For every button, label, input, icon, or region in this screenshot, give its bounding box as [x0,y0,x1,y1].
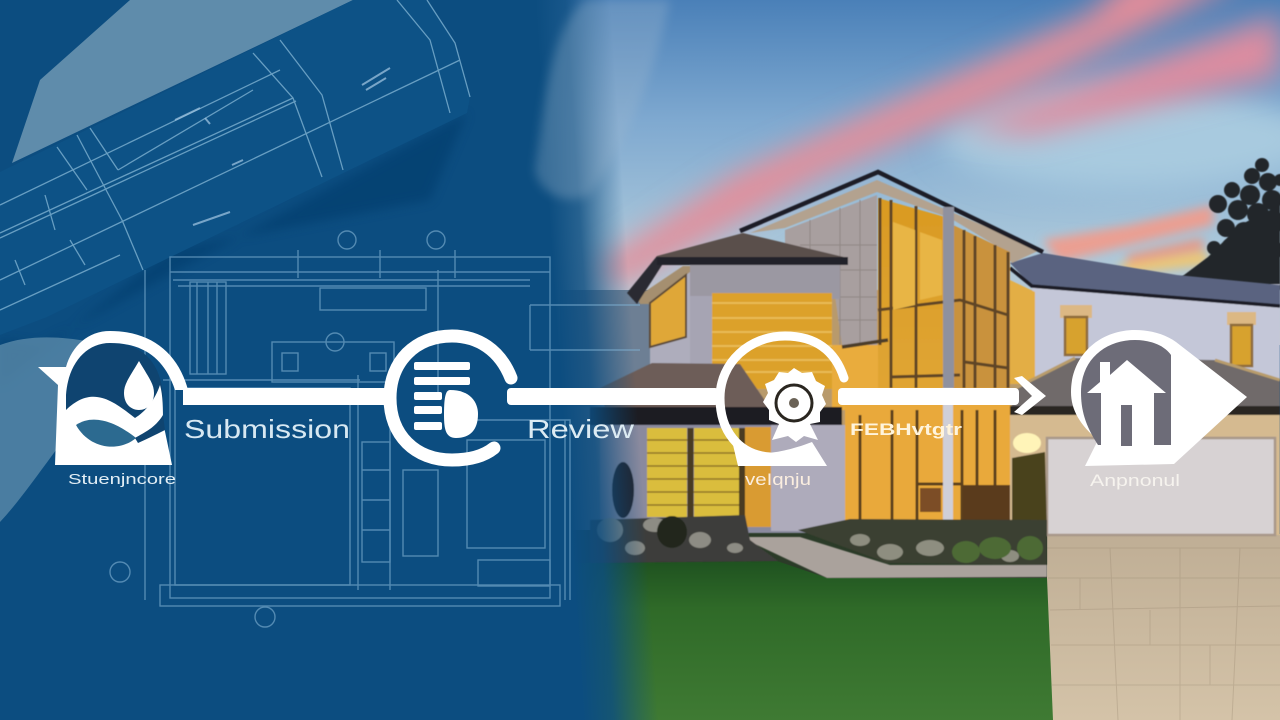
railing [963,485,1010,529]
stone courses [800,200,877,345]
lawn [560,561,1054,720]
right roof highlight [1012,358,1280,390]
central lit hall [845,388,1010,530]
stone pillar [690,296,712,380]
hall frames [860,410,995,530]
right roof shadow line [1010,268,1280,306]
window post [690,428,742,520]
stone gable wall [785,195,877,345]
small label under step 3: veIqnju [745,470,811,489]
lower stone and lit wall [832,345,878,410]
sky with sunset clouds [0,0,1280,345]
step 2 icon: review [390,336,511,460]
house symbol [1087,360,1166,446]
house base fill [650,290,1035,530]
walkway [740,537,1047,578]
left eave [627,256,664,304]
porch light [1013,433,1041,453]
rosette badge [763,368,826,442]
light wall [771,425,845,531]
right dark eave [1010,406,1280,415]
arrowhead [1014,376,1046,415]
right wing roof [1010,253,1280,306]
left wing upper wall [690,265,840,299]
connector: technical to approval [838,388,1019,405]
amber door [745,427,771,527]
left soffit [637,266,690,304]
right planting bed [798,519,1047,565]
steel column [943,207,954,533]
garage door [1047,438,1275,535]
label: submission: Submission [184,414,350,444]
small label near technical step: FEBHvtgtr [850,420,963,439]
wood panel stripes [712,303,832,372]
beam at lit wall [842,340,888,347]
hand holding plan [0,337,125,522]
paper sheet [12,0,353,163]
label: review: Review [527,414,634,444]
step 3 icon: certification [720,336,844,466]
soffit [750,180,1040,263]
right lower roof [1012,358,1280,407]
lower left roof [600,363,770,408]
right lower wall [1010,415,1280,535]
steel post lower [943,388,953,533]
shadow beneath blueprint roll [0,113,467,385]
driveway [1047,534,1280,720]
step 4 icon: approval [1071,330,1247,466]
left planting bed [590,515,778,563]
left shrub [612,462,634,518]
process connector line [183,376,1046,415]
right wing wall [1032,284,1280,384]
tower light reflections [893,222,942,310]
small label under step 1: Stuenjncore [68,471,176,488]
upper roof ridge [740,172,1043,252]
ground base under beds [560,530,1050,580]
faint hand over the sky [535,0,670,199]
connector: review to technical [507,388,719,405]
lower left wall [600,425,845,533]
tower mullions [878,198,1008,530]
house [590,172,1280,578]
left dark eave [590,407,842,425]
rolled blueprint [0,0,470,335]
cypress shrub [1012,452,1047,533]
left hip roof [657,233,848,262]
tree behind the house [1180,158,1280,290]
step 1 icon: submission [38,331,188,465]
amber wood panel [712,293,832,389]
right wing windows [1065,317,1252,366]
glass tower right bay [953,225,1010,528]
left wing lower wall [650,272,690,376]
floor plan line drawing [110,231,640,627]
shutter lines [647,440,739,505]
framed hall picture [920,488,941,512]
side wall base behind fade [560,290,680,570]
glass tower left bay [878,198,945,528]
left wing window [650,275,686,347]
small label under step 4: Anpnonul [1090,471,1180,490]
shutters [647,428,739,517]
roll annotations [175,68,390,225]
connector: submission to review [183,388,388,405]
left roof dark edge [657,257,848,265]
yellow side wall [1010,280,1035,384]
window glows [1060,305,1256,325]
